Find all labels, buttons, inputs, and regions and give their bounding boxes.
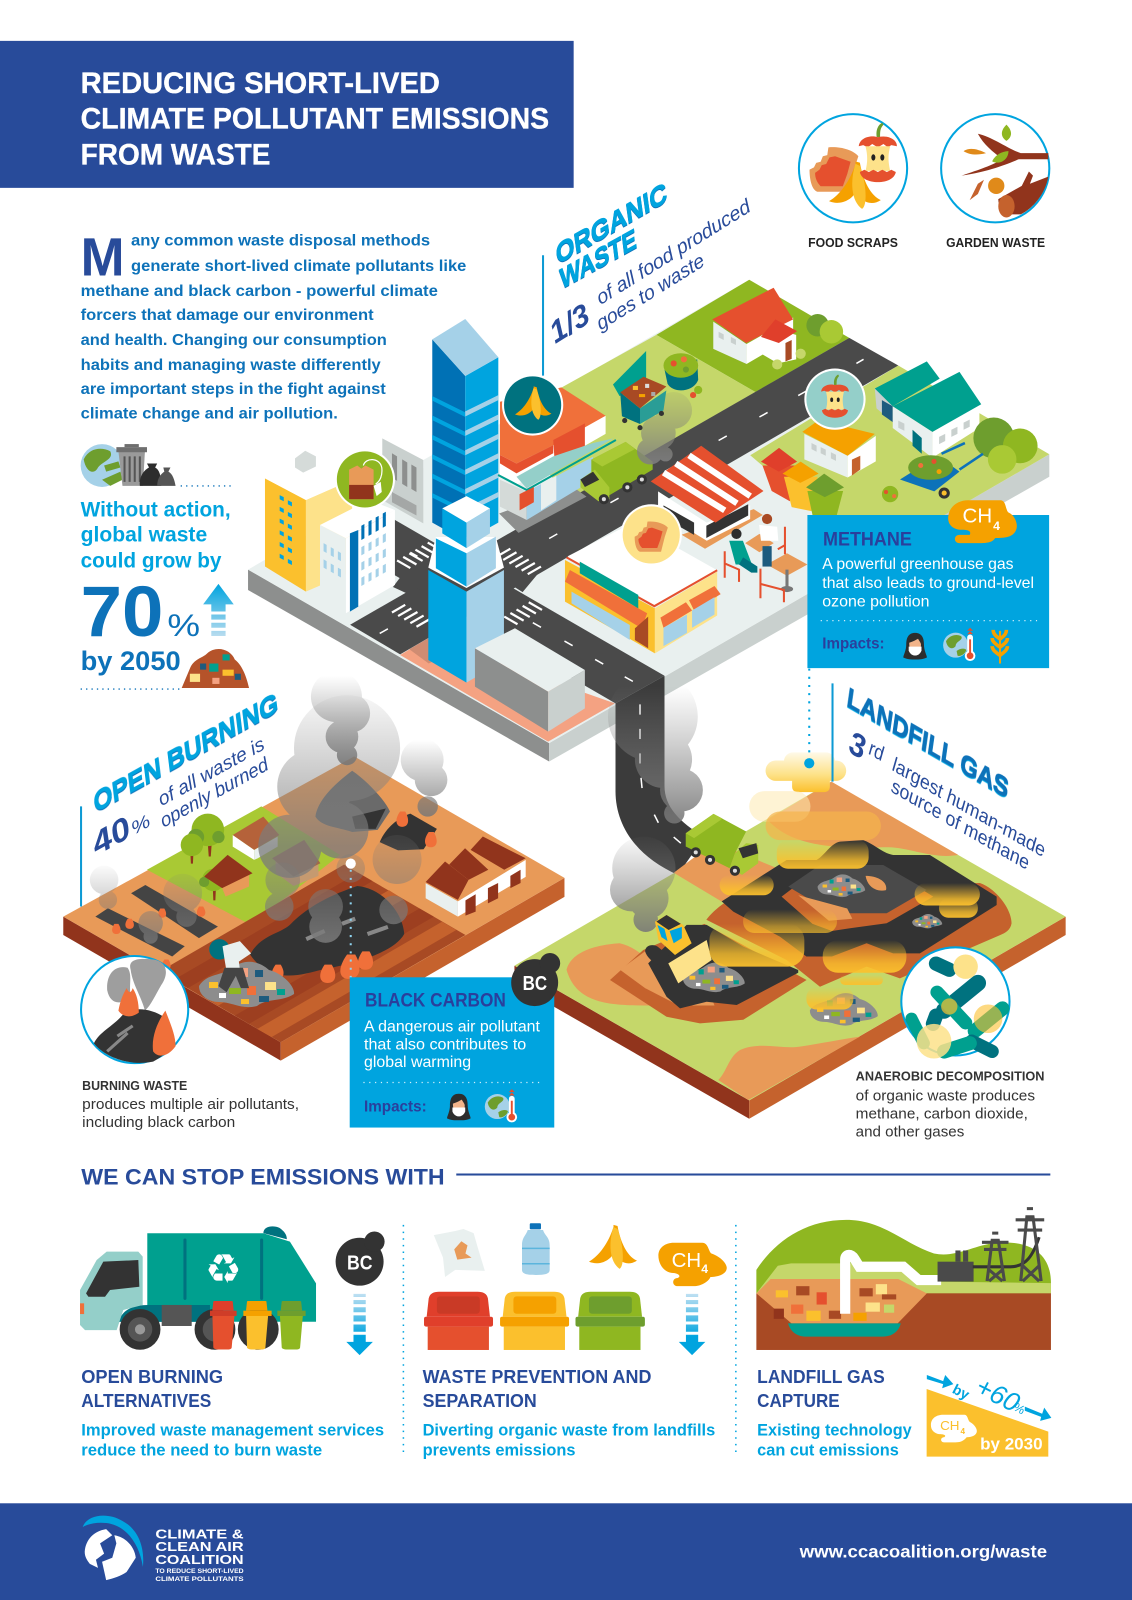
chart: 60 percent reduction wedge: by 2030 bbox=[980, 1435, 1043, 1453]
intro text bbox=[81, 228, 467, 423]
panel: methane bbox=[807, 500, 1049, 668]
orange earth patches bbox=[567, 782, 958, 1100]
stat: waste could grow 70 percent: Without action, bbox=[81, 498, 231, 522]
anaerobic caption: of organic waste produces bbox=[856, 1088, 1035, 1104]
column divider bbox=[402, 1225, 404, 1457]
bushes bbox=[973, 418, 1038, 474]
logo text: CLIMATE & bbox=[155, 1526, 244, 1541]
title banner bbox=[0, 41, 574, 188]
intro text: forcers that damage our environment bbox=[81, 307, 374, 324]
icon: BC cloud: BC bbox=[347, 1252, 373, 1274]
column: waste prevention bbox=[423, 1223, 727, 1460]
icon: BC cloud bbox=[511, 953, 560, 1006]
marker: banana bbox=[502, 374, 563, 436]
heading: CAPTURE bbox=[757, 1391, 840, 1412]
trees bbox=[181, 814, 225, 900]
heading: organic waste bbox=[545, 176, 755, 350]
white building bbox=[320, 500, 395, 613]
burnt village houses bbox=[204, 817, 320, 897]
heading: OPEN BURNING bbox=[81, 1367, 223, 1388]
intro text: any common waste disposal methods bbox=[131, 233, 430, 250]
burning waste caption bbox=[82, 1078, 299, 1131]
title: REDUCING SHORT-LIVED bbox=[81, 67, 440, 100]
description bbox=[757, 1422, 912, 1460]
panel: city / organic waste bbox=[248, 280, 1049, 762]
blue front tower bbox=[428, 496, 504, 683]
column divider bbox=[735, 1225, 737, 1457]
panel: black carbon: that also contributes to bbox=[364, 1036, 526, 1053]
panel: methane: that also leads to ground-level bbox=[822, 575, 1034, 592]
panel: methane: METHANE bbox=[823, 529, 912, 551]
organic waste rule bbox=[542, 255, 544, 376]
stat: waste could grow 70 percent: 70 bbox=[81, 572, 163, 652]
icon: CH4 cloud: 4 bbox=[701, 1262, 708, 1276]
circle labels: FOOD SCRAPS bbox=[808, 235, 898, 250]
heading bbox=[423, 1367, 651, 1412]
circle labels bbox=[808, 235, 1045, 250]
gray back building bbox=[382, 417, 439, 523]
row house bbox=[426, 837, 526, 917]
smoke behind bulldozer bbox=[610, 837, 676, 932]
stat: waste could grow 70 percent: by 2050 bbox=[81, 646, 181, 676]
title bbox=[81, 67, 549, 171]
burning waste inset circle bbox=[81, 956, 188, 1063]
heading: landfill gas: 3 bbox=[845, 724, 870, 767]
website: www.ccacoalition.org/waste bbox=[799, 1541, 1047, 1561]
bacteria inset circle bbox=[901, 947, 1010, 1059]
methane callout connector bbox=[804, 669, 814, 768]
intro text: are important steps in the fight against bbox=[81, 381, 387, 398]
panel: black carbon bbox=[350, 953, 560, 1128]
truck exhaust smoke bbox=[637, 392, 692, 464]
open burning rule bbox=[80, 806, 82, 906]
heading bbox=[757, 1367, 885, 1412]
platform bbox=[514, 782, 1066, 1119]
panel: open burning bbox=[63, 671, 564, 1061]
icon: plastic bottle bbox=[522, 1223, 550, 1275]
tall blue tower bbox=[432, 319, 498, 541]
title: FROM WASTE bbox=[81, 138, 270, 171]
crosswalks bbox=[392, 543, 542, 627]
heading bbox=[81, 1367, 223, 1412]
icon: warming globe bbox=[485, 1089, 517, 1122]
burning waste caption: including black carbon bbox=[82, 1115, 235, 1131]
icon: masked woman bbox=[447, 1094, 471, 1120]
logo text: TO REDUCE SHORT-LIVED bbox=[155, 1568, 244, 1575]
callout dotted line bbox=[346, 858, 356, 978]
icon: CH4 cloud: 4 bbox=[961, 1427, 966, 1436]
compost bin bbox=[663, 353, 702, 398]
gray block bbox=[475, 628, 585, 732]
heading: landfill gas bbox=[845, 683, 1048, 875]
roads bbox=[316, 338, 898, 703]
wheelbarrow of leaves bbox=[882, 443, 983, 502]
burn piles bbox=[250, 771, 437, 983]
icon: waste heap bbox=[182, 649, 249, 688]
stat: waste could grow 70 percent: could grow by bbox=[81, 549, 222, 573]
footer bbox=[0, 1503, 1132, 1600]
heading: organic waste: of all food produced bbox=[593, 194, 755, 310]
heading: open burning: OPEN BURNING bbox=[92, 686, 280, 819]
icon: garbage truck with bins bbox=[80, 1226, 316, 1350]
heading: ALTERNATIVES bbox=[81, 1391, 211, 1412]
marker: pie bbox=[621, 504, 682, 566]
chart: 60 percent reduction wedge bbox=[927, 1371, 1051, 1457]
bulldozer bbox=[645, 915, 712, 983]
icon: red bin bbox=[424, 1292, 493, 1350]
food-waste shop bbox=[565, 523, 721, 653]
panel: methane: ozone pollution bbox=[822, 593, 929, 610]
burning waste caption: BURNING WASTE bbox=[82, 1078, 187, 1093]
garbage truck bbox=[686, 814, 758, 876]
column: landfill gas capture bbox=[756, 1209, 1051, 1460]
description: prevents emissions bbox=[423, 1442, 575, 1460]
icon: crumpled paper bbox=[434, 1229, 485, 1277]
landfill rule bbox=[832, 683, 834, 782]
icon: CH4 cloud: CH bbox=[940, 1418, 959, 1433]
panel: black carbon: BLACK CARBON bbox=[365, 989, 506, 1011]
logo text: CLIMATE POLLUTANTS bbox=[155, 1576, 244, 1583]
icon: green bin bbox=[575, 1292, 645, 1350]
panel: methane: A powerful greenhouse gas bbox=[822, 556, 1014, 573]
red roof house bbox=[712, 288, 843, 370]
dotted rule bbox=[81, 688, 180, 690]
furrowed field bbox=[159, 865, 465, 1042]
lawn bbox=[147, 806, 340, 925]
stat: waste could grow 70 percent bbox=[81, 498, 249, 688]
icon: BC cloud bbox=[336, 1231, 385, 1286]
left pit bbox=[610, 924, 807, 1023]
intro text: habits and managing waste differently bbox=[81, 357, 381, 374]
marker: tea bag bbox=[335, 449, 395, 509]
logo bbox=[83, 1516, 143, 1580]
orange roof house bbox=[802, 420, 876, 477]
open dumpster bbox=[613, 351, 666, 430]
icon: CH4 cloud bbox=[948, 500, 1017, 543]
heading: landfill gas: rd bbox=[866, 737, 887, 766]
heading: organic waste: 1/3 bbox=[545, 297, 595, 350]
icon: wheat bbox=[992, 630, 1007, 664]
heading: open burning: openly burned bbox=[158, 753, 273, 833]
heading: open burning bbox=[86, 686, 280, 863]
heading: SEPARATION bbox=[423, 1391, 537, 1412]
smoke columns bbox=[90, 671, 447, 944]
intro text: and health. Changing our consumption bbox=[81, 332, 387, 349]
heading: landfill gas: LANDFILL GAS bbox=[845, 683, 1010, 804]
main pit bbox=[706, 840, 1012, 987]
stat: waste could grow 70 percent: % bbox=[167, 607, 200, 643]
icon: CH4 cloud: 4 bbox=[993, 519, 1000, 533]
icon: banana peel bbox=[589, 1225, 637, 1269]
icon: yellow bin bbox=[500, 1292, 569, 1350]
panel: black carbon: A dangerous air pollutant bbox=[364, 1019, 541, 1036]
anaerobic caption bbox=[856, 1068, 1045, 1141]
icon: BC cloud: BC bbox=[523, 973, 547, 995]
description: can cut emissions bbox=[757, 1442, 899, 1460]
heading: open burning: 40 bbox=[86, 809, 135, 863]
food scraps circle bbox=[799, 114, 907, 222]
green truck bbox=[580, 442, 653, 504]
stat: waste could grow 70 percent: global waste bbox=[81, 523, 207, 547]
logo text: CLEAN AIR bbox=[155, 1539, 244, 1554]
salmon base bbox=[400, 638, 615, 742]
icon: masked woman bbox=[903, 633, 927, 659]
description bbox=[423, 1422, 715, 1460]
heading: organic waste: WASTE bbox=[558, 222, 638, 295]
heading: organic waste: goes to waste bbox=[593, 249, 708, 335]
panel: landfill bbox=[514, 752, 1066, 1119]
illustration: gas capture landfill bbox=[756, 1209, 1051, 1350]
person sorting waste bbox=[209, 928, 251, 992]
marker: apple core bbox=[804, 369, 866, 430]
teal roof houses bbox=[875, 361, 981, 458]
dotted rule bbox=[181, 485, 235, 487]
cafe tables and people bbox=[725, 514, 807, 602]
title: CLIMATE POLLUTANT EMISSIONS bbox=[81, 103, 549, 136]
panel: methane: Impacts: bbox=[822, 636, 885, 653]
chart: 60 percent reduction wedge: by bbox=[950, 1382, 972, 1403]
icon: CH4 cloud bbox=[658, 1243, 727, 1286]
description bbox=[81, 1422, 384, 1460]
heading: open burning: % bbox=[128, 810, 153, 839]
description: Existing technology bbox=[757, 1422, 912, 1440]
panel: black carbon: Impacts: bbox=[364, 1099, 427, 1116]
logo text: COALITION bbox=[155, 1552, 244, 1567]
anaerobic caption: and other gases bbox=[856, 1125, 964, 1141]
heading: WASTE PREVENTION AND bbox=[423, 1367, 651, 1388]
section heading: solutions: WE CAN STOP EMISSIONS WITH bbox=[81, 1164, 445, 1189]
circle labels: GARDEN WASTE bbox=[946, 235, 1045, 250]
anaerobic caption: ANAEROBIC DECOMPOSITION bbox=[856, 1068, 1045, 1083]
heading: open burning: of all waste is bbox=[156, 733, 268, 811]
intro text: methane and black carbon - powerful climate bbox=[81, 283, 438, 300]
burning waste caption: produces multiple air pollutants, bbox=[82, 1097, 299, 1113]
road to landfill with smoke bbox=[608, 672, 704, 875]
platform bbox=[63, 756, 564, 1061]
striped awning restaurant bbox=[651, 446, 764, 549]
description: Diverting organic waste from landfills bbox=[423, 1422, 715, 1440]
icon: globe, trash can and bags bbox=[81, 444, 176, 487]
panel: black carbon: global warming bbox=[364, 1054, 471, 1071]
column: open burning alternatives bbox=[80, 1226, 385, 1460]
anaerobic caption: methane, carbon dioxide, bbox=[856, 1107, 1028, 1123]
garden waste circle bbox=[941, 114, 1049, 222]
down arrow bbox=[346, 1294, 373, 1355]
heading: landfill gas: largest human-made bbox=[890, 754, 1048, 862]
icon: CH4 cloud: CH bbox=[963, 506, 992, 528]
down arrow bbox=[679, 1294, 705, 1355]
icon: CH4 cloud: CH bbox=[672, 1250, 701, 1272]
methane vapours bbox=[709, 752, 980, 1010]
heading: landfill gas: source of methane bbox=[889, 776, 1032, 875]
intro text: climate change and air pollution. bbox=[81, 406, 338, 423]
recycling bins bbox=[761, 448, 844, 515]
burning rows bbox=[95, 885, 218, 970]
mixed waste pile bbox=[199, 962, 294, 1007]
icon: CH4 cloud bbox=[931, 1415, 977, 1442]
description: reduce the need to burn waste bbox=[81, 1442, 322, 1460]
heading: organic waste: ORGANIC bbox=[554, 176, 669, 271]
intro text: generate short-lived climate pollutants like bbox=[131, 258, 467, 275]
chart: 60 percent reduction wedge: % bbox=[1011, 1400, 1027, 1417]
logo text bbox=[155, 1526, 244, 1583]
orange shop bbox=[498, 387, 616, 533]
icon: warming globe bbox=[943, 628, 975, 661]
platform bbox=[248, 280, 1049, 762]
chart: 60 percent reduction wedge: +60 bbox=[971, 1371, 1025, 1418]
waste heaps bbox=[683, 874, 942, 1026]
description: Improved waste management services bbox=[81, 1422, 384, 1440]
intro text: M bbox=[81, 228, 125, 288]
lawns bbox=[500, 280, 1049, 533]
heading: LANDFILL GAS bbox=[757, 1367, 885, 1388]
yellow building bbox=[265, 451, 352, 592]
recycling symbol: ♻ bbox=[205, 1245, 242, 1293]
icon: up arrow bbox=[203, 584, 234, 636]
